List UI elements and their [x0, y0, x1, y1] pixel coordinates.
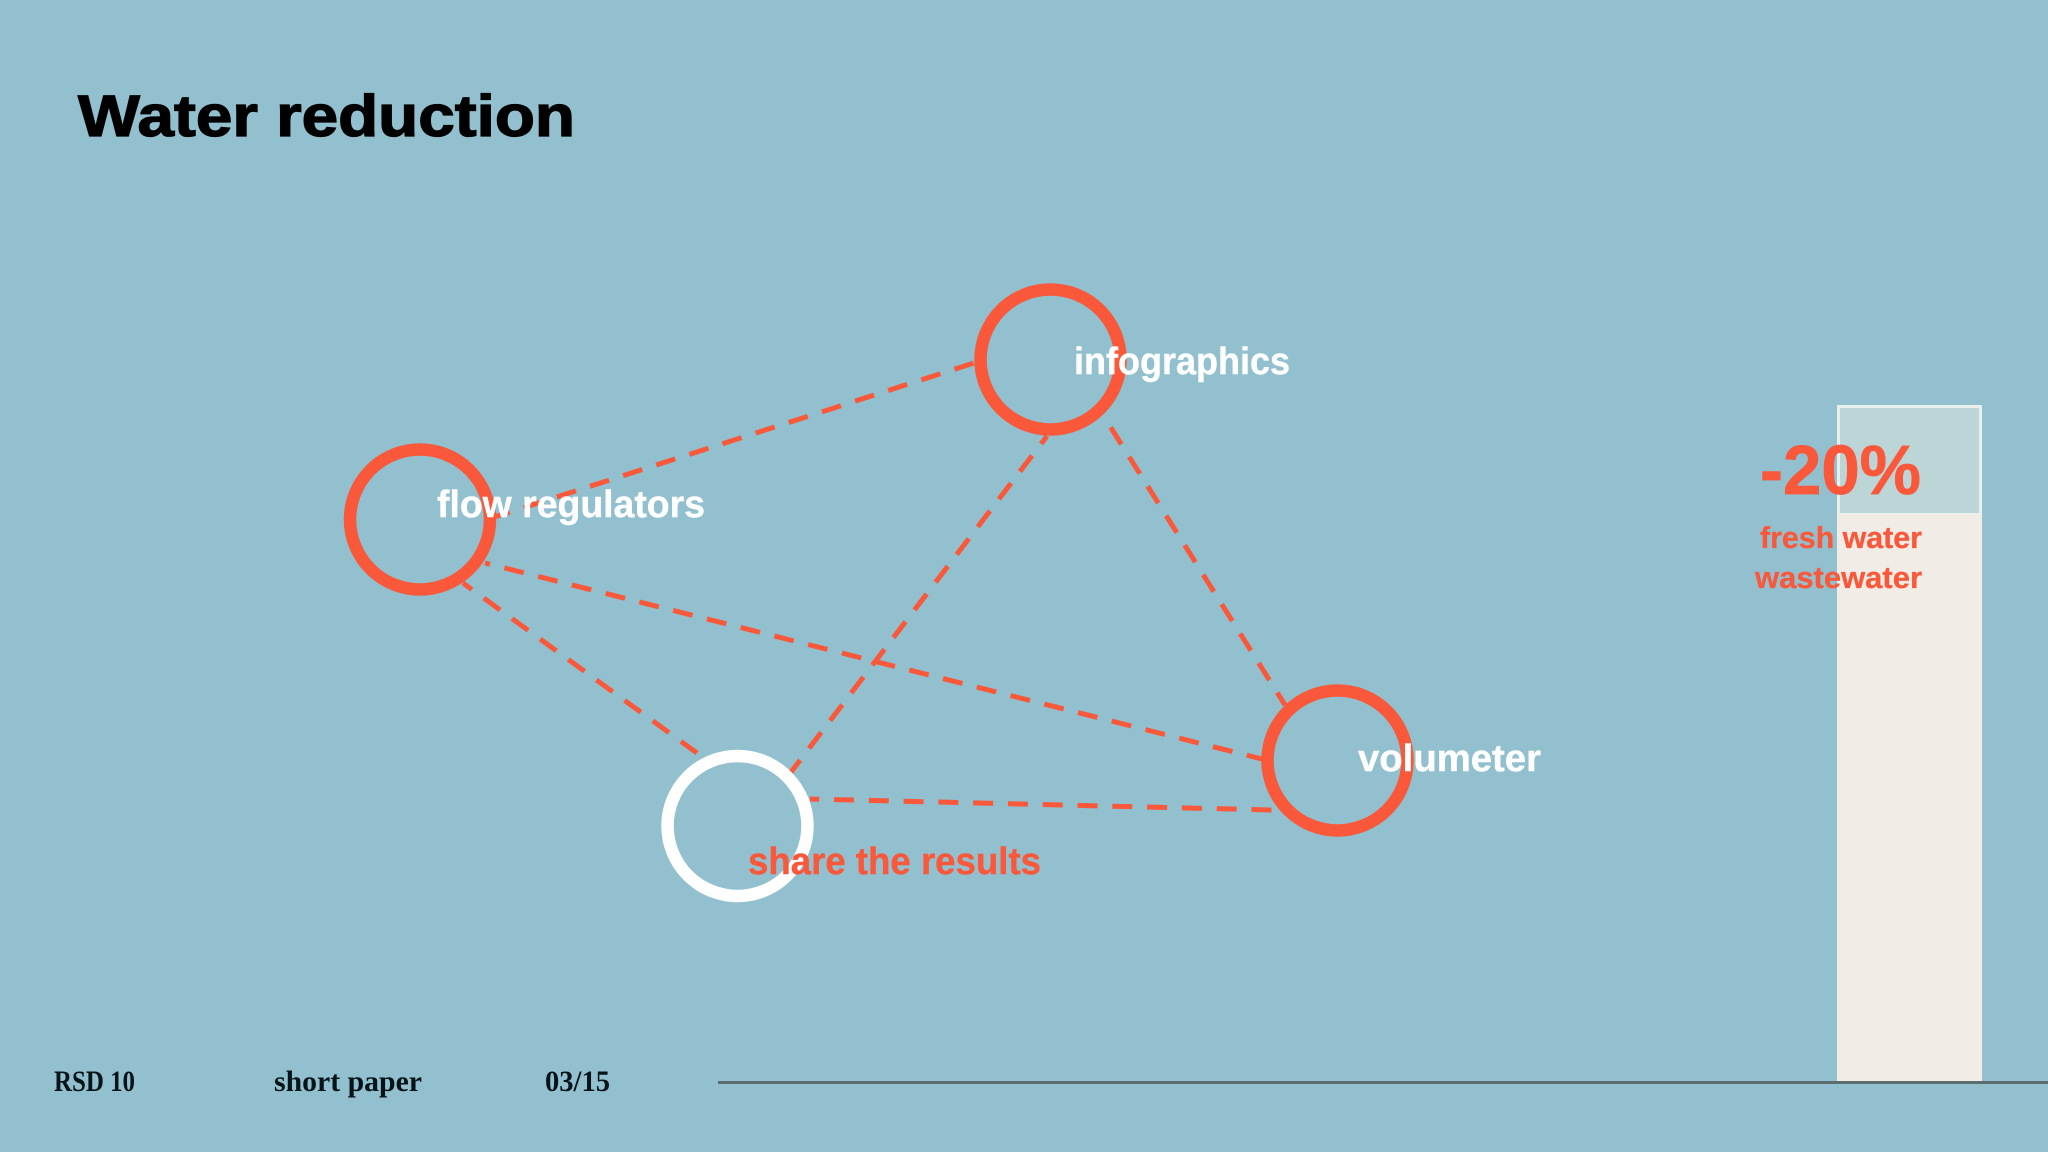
node: volumeter	[1268, 690, 1541, 830]
node: infographics: infographics	[1074, 341, 1290, 383]
bar: remaining portion	[1837, 514, 1982, 1082]
footer: conference name: RSD 10	[54, 1065, 135, 1098]
callout: -20%: fresh water	[1760, 520, 1922, 555]
node: share the results: share the results	[748, 841, 1041, 883]
node: flow regulators: flow regulators	[437, 484, 705, 526]
node: flow regulators	[350, 450, 705, 590]
callout: -20%: wastewater	[1754, 560, 1922, 595]
footer: page number: 03/15	[545, 1065, 610, 1098]
network diagram	[350, 290, 1541, 896]
node: volumeter: volumeter	[1358, 738, 1541, 780]
footer: paper type: short paper	[274, 1065, 422, 1098]
node: infographics	[980, 290, 1290, 430]
node: share the results	[668, 756, 1041, 896]
title: Water reduction	[78, 84, 575, 149]
footer	[54, 1065, 2048, 1098]
dashed connectors	[463, 362, 1285, 810]
bar: reduced portion	[1838, 406, 1980, 514]
water reduction bar	[1837, 406, 1982, 1082]
callout: -20%: -20%	[1760, 431, 1921, 509]
callout: -20%	[1754, 431, 1922, 595]
